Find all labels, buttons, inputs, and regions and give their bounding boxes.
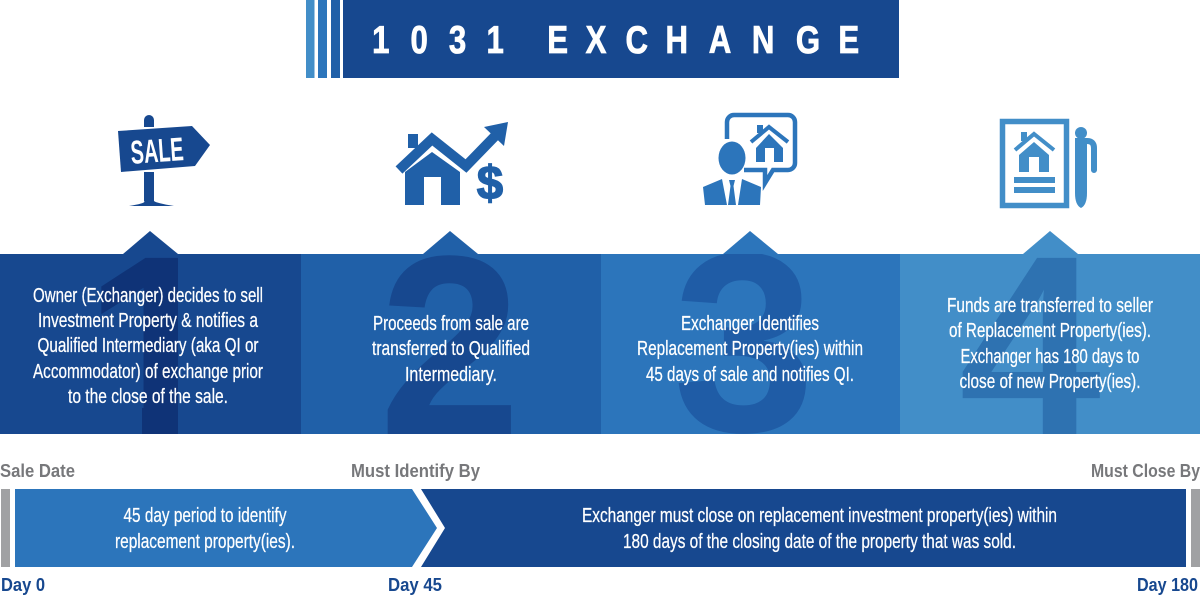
title: 1031EXCHANGE: [372, 19, 859, 62]
step 2 text: Proceeds from sale are: [373, 313, 529, 335]
step 1 text: to the close of the sale.: [68, 386, 228, 408]
sale sign text: SALE: [129, 130, 185, 171]
big number 3: 3: [673, 200, 815, 486]
panel: step 4: [900, 231, 1200, 434]
icon: sale sign: [118, 115, 210, 206]
step 3 text: 45 days of sale and notifies QI.: [646, 364, 854, 386]
step 2 text: transferred to Qualified: [372, 338, 530, 360]
step 1 text: Qualified Intermediary (aka QI or: [38, 335, 259, 357]
timeline bar: 180 day period: [421, 489, 1186, 567]
big number 2: 2: [379, 203, 521, 489]
45 day text: 45 day period to identify: [124, 505, 286, 527]
panel: step 1: [0, 231, 301, 434]
step 3 text: Replacement Property(ies) within: [637, 338, 863, 360]
icon: house with rising arrow and dollar: [399, 122, 508, 209]
timeline bar: 45 day period: [15, 489, 437, 567]
step 1 text: Owner (Exchanger) decides to sell: [33, 285, 263, 307]
step 3 text: [637, 313, 863, 386]
big number 4: 4: [959, 203, 1101, 489]
step 2 text: Intermediary.: [405, 364, 497, 386]
step 4 text: Exchanger has 180 days to: [960, 346, 1140, 368]
step 1 text: Investment Property & notifies a: [38, 310, 259, 332]
step 3 text: Exchanger Identifies: [681, 313, 819, 335]
180 day text: Exchanger must close on replacement investment property(ies) within: [582, 505, 1057, 527]
big number 1: 1: [84, 203, 226, 489]
45 day text: replacement property(ies).: [115, 531, 295, 553]
title banner: [306, 0, 899, 78]
icon: agent with speech bubble: [703, 115, 795, 205]
step 4 text: close of new Property(ies).: [960, 371, 1140, 393]
step 4 text: [947, 295, 1153, 393]
step 1 text: Accommodator) of exchange prior: [33, 361, 263, 383]
timeline label: sale date: Sale Date: [0, 460, 75, 481]
icon: contract with pen: [1002, 122, 1094, 208]
timeline label: must identify by: Must Identify By: [351, 460, 481, 481]
step 2 text: [372, 313, 530, 386]
timeline label: day 45: Day 45: [388, 574, 442, 595]
dollar sign: $: [477, 156, 503, 209]
timeline label: day 0: Day 0: [1, 574, 45, 595]
panel: step 3: [601, 231, 900, 434]
panel: step 2: [301, 231, 601, 434]
timeline start marker: [1, 489, 10, 567]
180 day text: 180 days of the closing date of the property that was sold.: [623, 531, 1016, 553]
45 day text: [115, 505, 295, 553]
step 1 text: [33, 285, 263, 408]
180 day text: [582, 505, 1057, 553]
timeline end marker: [1191, 489, 1200, 567]
